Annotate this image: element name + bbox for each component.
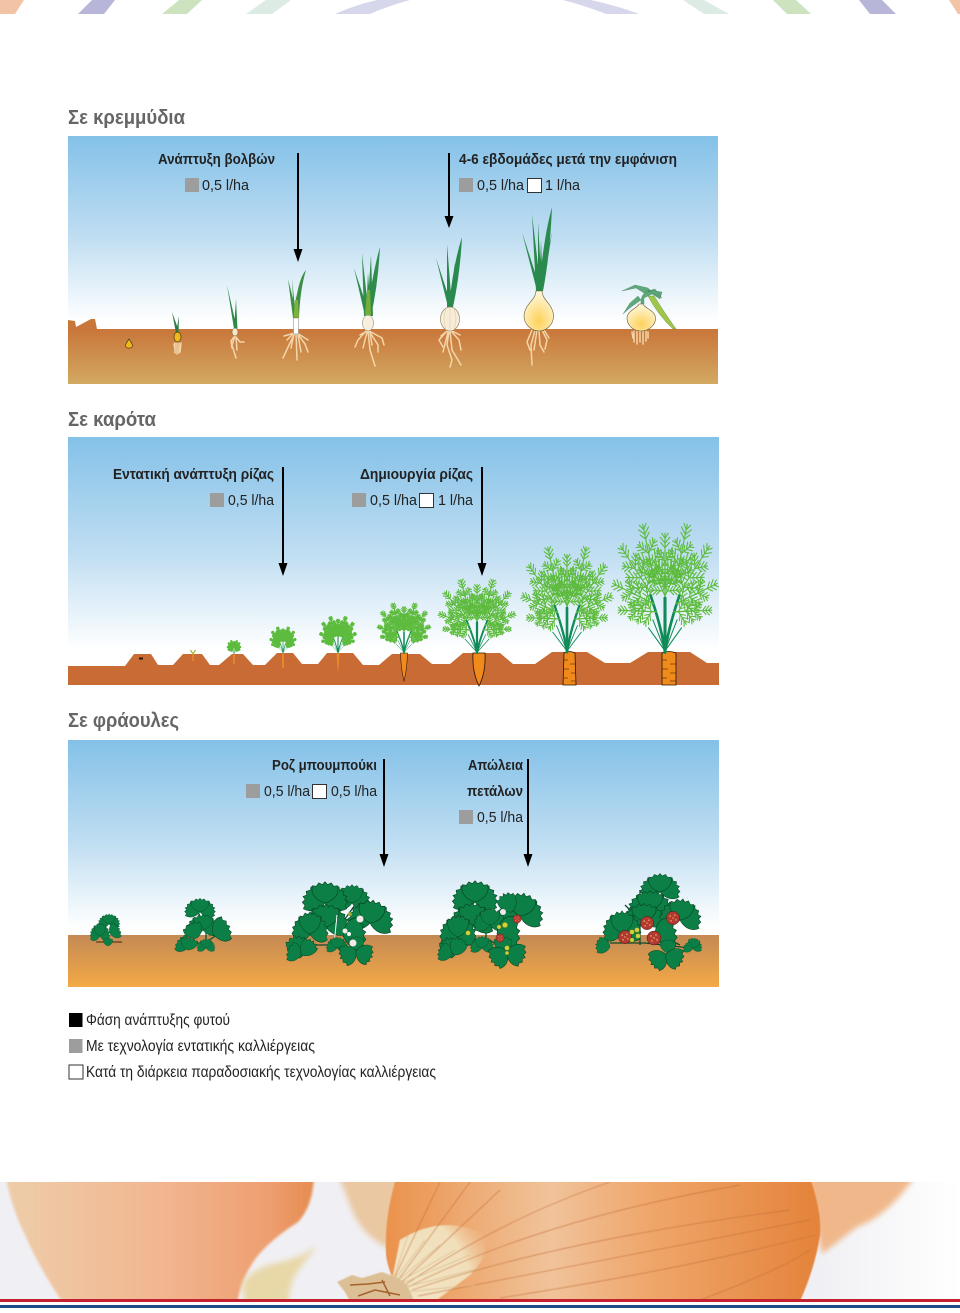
onion plant stage 8 xyxy=(622,285,676,344)
label: root formation: 0,5 l/ha xyxy=(370,492,418,509)
back onions xyxy=(338,1182,396,1250)
bottom stripes xyxy=(0,1299,960,1308)
panel: onions xyxy=(68,136,718,384)
arrow: onion stage 1 xyxy=(294,153,302,262)
carrot plant stage 3 xyxy=(227,640,241,664)
onion seed xyxy=(126,339,132,348)
arrow: onion stage 2 xyxy=(444,153,454,228)
label: 4-6 weeks after emergence xyxy=(459,151,677,194)
strawberry plant stage 2 xyxy=(172,898,235,955)
label: root formation: Δημιουργία ρίζας xyxy=(360,466,473,483)
label: 4-6 weeks after emergence: 0,5 l/ha xyxy=(477,177,525,194)
panel: strawberries xyxy=(68,740,719,987)
label: pink bud: 0,5 l/ha xyxy=(331,783,378,800)
strawberry plant stage 3 xyxy=(284,882,399,967)
carrot plant stage 6 xyxy=(375,601,433,681)
heading: carrots: Σε καρότα xyxy=(68,409,157,431)
carrot plant stage 8 xyxy=(517,543,617,685)
label: petal loss: 0,5 l/ha xyxy=(477,809,524,826)
left onion xyxy=(6,1182,316,1299)
heading: strawberries: Σε φράουλες xyxy=(68,710,179,732)
flowers xyxy=(342,916,364,946)
carrot seed xyxy=(139,658,143,660)
centre onion xyxy=(385,1182,821,1299)
carrot plant stage 4 xyxy=(269,626,297,668)
label: pink bud: Ροζ μπουμπούκι xyxy=(272,757,377,774)
bottom photo: onions xyxy=(0,1182,916,1299)
heading: onions: Σε κρεμμύδια xyxy=(68,107,186,129)
label: pink bud xyxy=(246,757,378,800)
strawberry plant stage 4 xyxy=(435,881,550,971)
label: bulb development: Ανάπτυξη βολβών xyxy=(158,151,275,168)
arrow: carrot stage 2 xyxy=(478,467,486,576)
carrot plant stage 7 xyxy=(435,577,519,686)
carrot plant stage 2 xyxy=(190,650,196,661)
label: bulb development xyxy=(158,151,275,194)
strawberry plant stage 5 xyxy=(594,874,707,973)
carrot plant stage 5 xyxy=(318,615,358,675)
label: bulb development: 0,5 l/ha xyxy=(202,177,250,194)
onion plant stage 2 xyxy=(172,312,181,354)
panel: carrots xyxy=(68,437,723,686)
label: 4-6 weeks after emergence: 4-6 εβδομάδες μετά την εμφάνιση xyxy=(459,151,677,168)
arrow: strawberry stage 1 xyxy=(380,759,388,867)
onion root tuft xyxy=(336,1272,414,1299)
onion plant stage 5 xyxy=(354,247,384,366)
legend item: intensive cultivation: Με τεχνολογία εντατικής καλλιέργειας xyxy=(86,1038,315,1055)
top decorative band xyxy=(0,0,960,14)
carrot plant stage 9 xyxy=(607,519,723,685)
arrow: strawberry stage 2 xyxy=(524,759,532,867)
label: petal loss: πετάλων xyxy=(467,783,523,800)
legend item: plant growth stage: Φάση ανάπτυξης φυτού xyxy=(86,1012,230,1029)
label: petal loss xyxy=(459,757,524,826)
onion plant stage 4 xyxy=(283,270,308,360)
label: root formation xyxy=(352,466,474,509)
onion plant stage 7 xyxy=(522,207,554,365)
label: intensive root growth: 0,5 l/ha xyxy=(228,492,275,509)
legend item: traditional cultivation: Κατά τη διάρκεια παραδοσιακής τεχνολογίας καλλιέργειας xyxy=(86,1064,436,1081)
label: 4-6 weeks after emergence: 1 l/ha xyxy=(545,177,581,194)
onion sprout xyxy=(240,1246,317,1299)
soil with ridges xyxy=(68,652,719,685)
onion plant stage 6 xyxy=(436,237,462,367)
label: intensive root growth: Εντατική ανάπτυξη ρίζας xyxy=(113,466,274,483)
onion plant stage 3 xyxy=(227,285,244,358)
arrow: carrot stage 1 xyxy=(278,467,288,576)
strawberry plant stage 1 xyxy=(89,914,124,946)
label: petal loss: Απώλεια xyxy=(468,757,524,774)
label: root formation: 1 l/ha xyxy=(438,492,474,509)
label: pink bud: 0,5 l/ha xyxy=(264,783,311,800)
legend xyxy=(69,1012,436,1081)
label: intensive root growth xyxy=(113,466,275,509)
